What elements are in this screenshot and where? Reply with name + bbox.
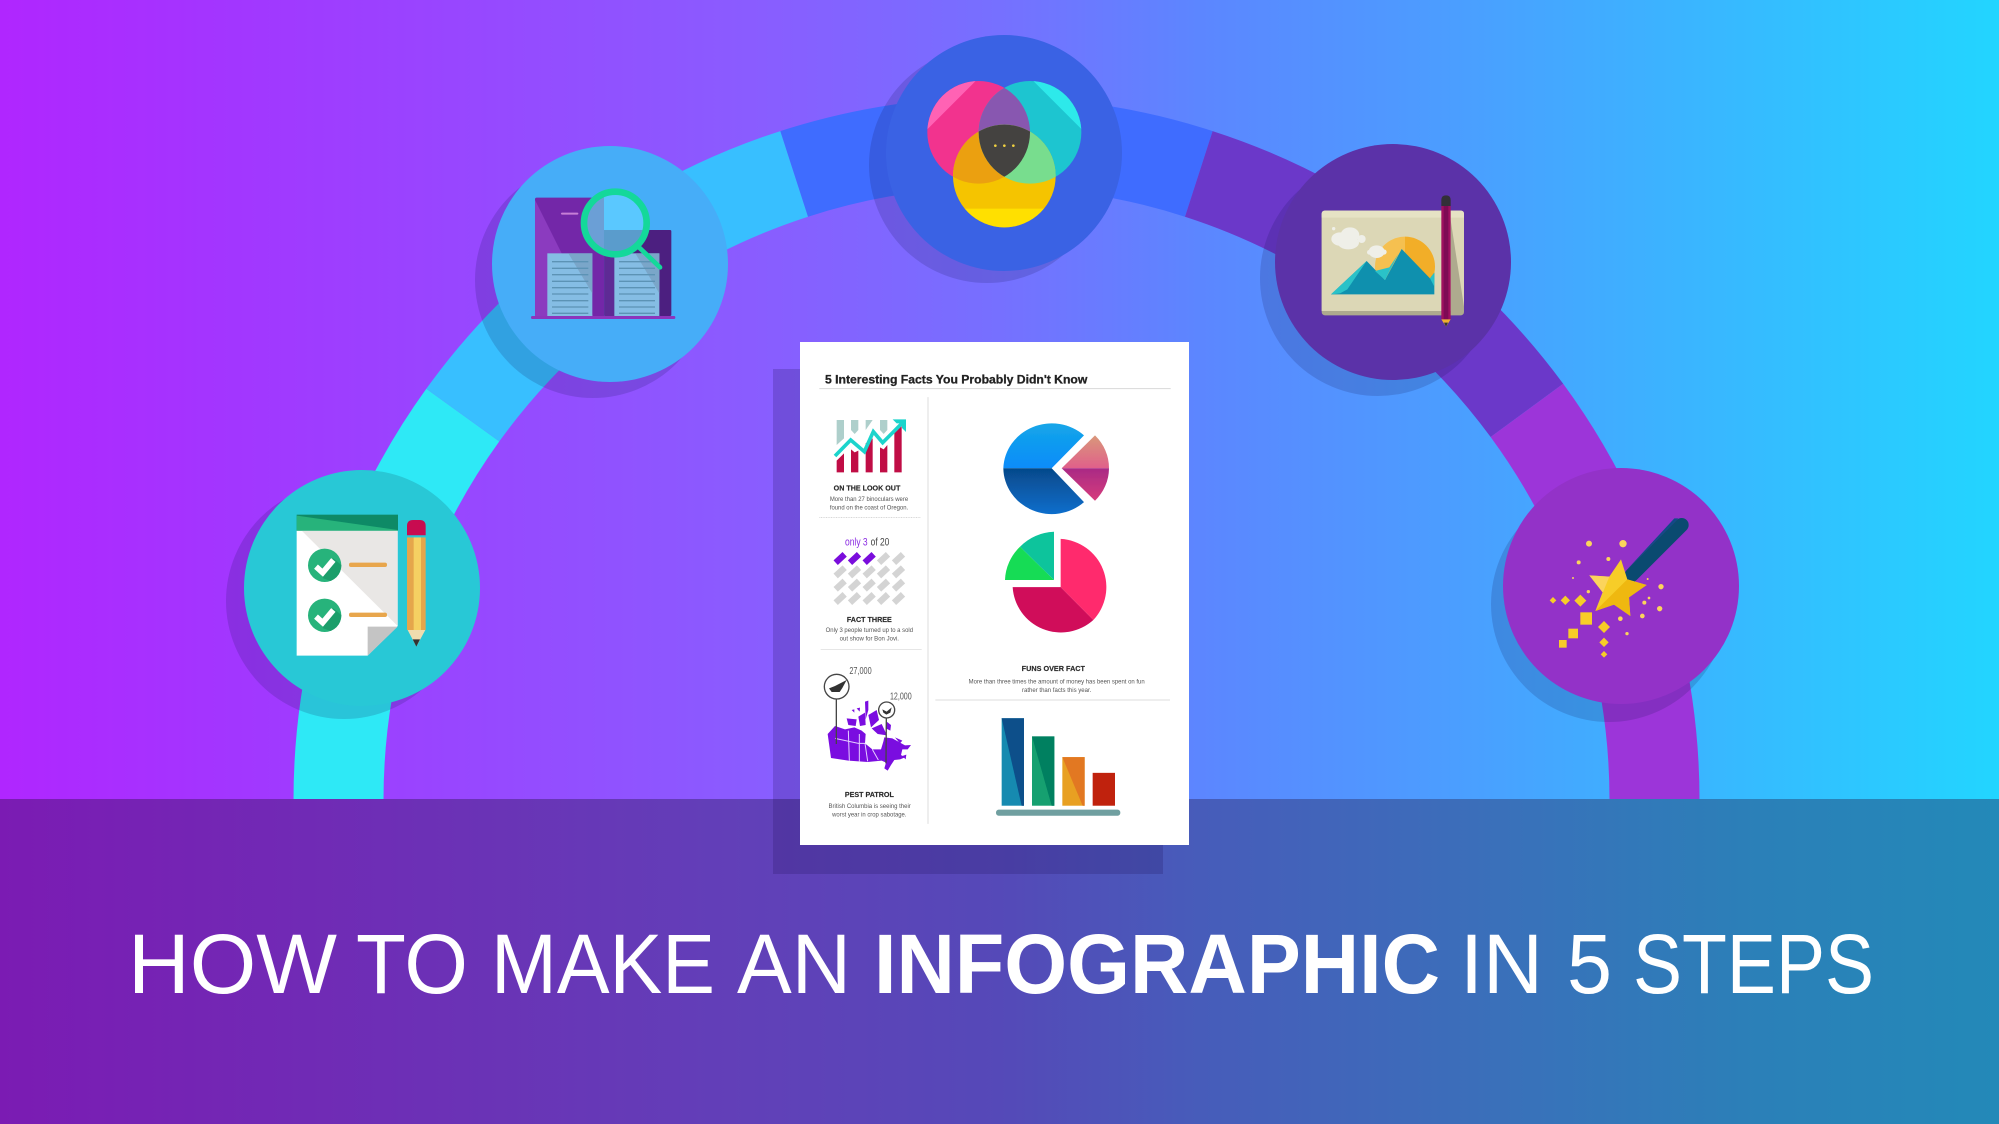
sample infographic document bbox=[773, 342, 1189, 874]
main title: AN bbox=[737, 917, 851, 1011]
fact: pest patrol: worst year in crop sabotage. bbox=[831, 812, 907, 818]
arc path through the five steps bbox=[338, 142, 1654, 800]
map of Canada with pest pins: 12,000 bbox=[890, 691, 912, 702]
chart: rising bars with arrow bbox=[835, 419, 906, 472]
pie chart: pink with exploded green wedge bbox=[1005, 532, 1106, 632]
main title: STEPS bbox=[1633, 917, 1874, 1011]
fact: funs over fact: More than three times the amount of money has been spent on fun bbox=[969, 679, 1145, 686]
fact three bbox=[826, 615, 913, 643]
main title: IN bbox=[1460, 917, 1543, 1011]
fact: on the look out: ON THE LOOK OUT bbox=[834, 483, 901, 492]
fact three: FACT THREE bbox=[847, 615, 892, 624]
pictogram: only 3 of 20: only 3 bbox=[845, 536, 868, 548]
pictogram: only 3 of 20: of 20 bbox=[871, 536, 889, 548]
fact: on the look out bbox=[830, 483, 909, 512]
main title: HOW bbox=[128, 917, 337, 1011]
bottom banner bbox=[0, 799, 1999, 1124]
icon: checklist and pencil bbox=[297, 515, 426, 656]
step 3: venn diagram circle bbox=[869, 35, 1122, 283]
document title: 5 Interesting Facts You Probably Didn't Know bbox=[825, 374, 1087, 387]
step 1: checklist circle bbox=[226, 470, 480, 719]
fact: on the look out: found on the coast of Oregon. bbox=[830, 506, 909, 512]
fact: funs over fact: rather than facts this year. bbox=[1022, 688, 1092, 694]
fact three: out show for Bon Jovi. bbox=[840, 637, 899, 643]
main title: INFOGRAPHIC bbox=[874, 917, 1440, 1011]
pictogram: only 3 of 20 bbox=[836, 536, 903, 603]
bar chart: four descending bars bbox=[996, 718, 1120, 816]
fact: pest patrol bbox=[828, 790, 911, 818]
map of Canada with pest pins: 27,000 bbox=[849, 666, 872, 677]
main title: MAKE bbox=[491, 917, 715, 1011]
fact: funs over fact bbox=[969, 664, 1145, 694]
fact: pest patrol: British Columbia is seeing their bbox=[828, 804, 911, 810]
icon: magic wand with star and sparkles bbox=[1550, 518, 1682, 658]
icon: books and magnifying glass bbox=[531, 192, 675, 319]
step 4: sketch pad circle bbox=[1260, 144, 1511, 396]
main title: 5 bbox=[1567, 917, 1612, 1011]
document shadow bbox=[773, 369, 1163, 874]
fact: pest patrol: PEST PATROL bbox=[845, 790, 894, 799]
fact: funs over fact: FUNS OVER FACT bbox=[1022, 664, 1086, 673]
step 2: research circle bbox=[475, 146, 728, 398]
fact: on the look out: More than 27 binoculars were bbox=[830, 497, 908, 503]
icon: three-circle venn diagram bbox=[923, 78, 1085, 229]
white page bbox=[800, 342, 1189, 845]
main title: TO bbox=[356, 917, 468, 1011]
step 5: magic wand circle bbox=[1491, 468, 1739, 722]
map of Canada with pest pins bbox=[824, 666, 912, 771]
fact three: Only 3 people turned up to a sold bbox=[826, 628, 913, 634]
icon: sketchbook with mountains and pen bbox=[1322, 195, 1464, 327]
pie chart: blue with exploded wedge bbox=[1003, 423, 1109, 514]
